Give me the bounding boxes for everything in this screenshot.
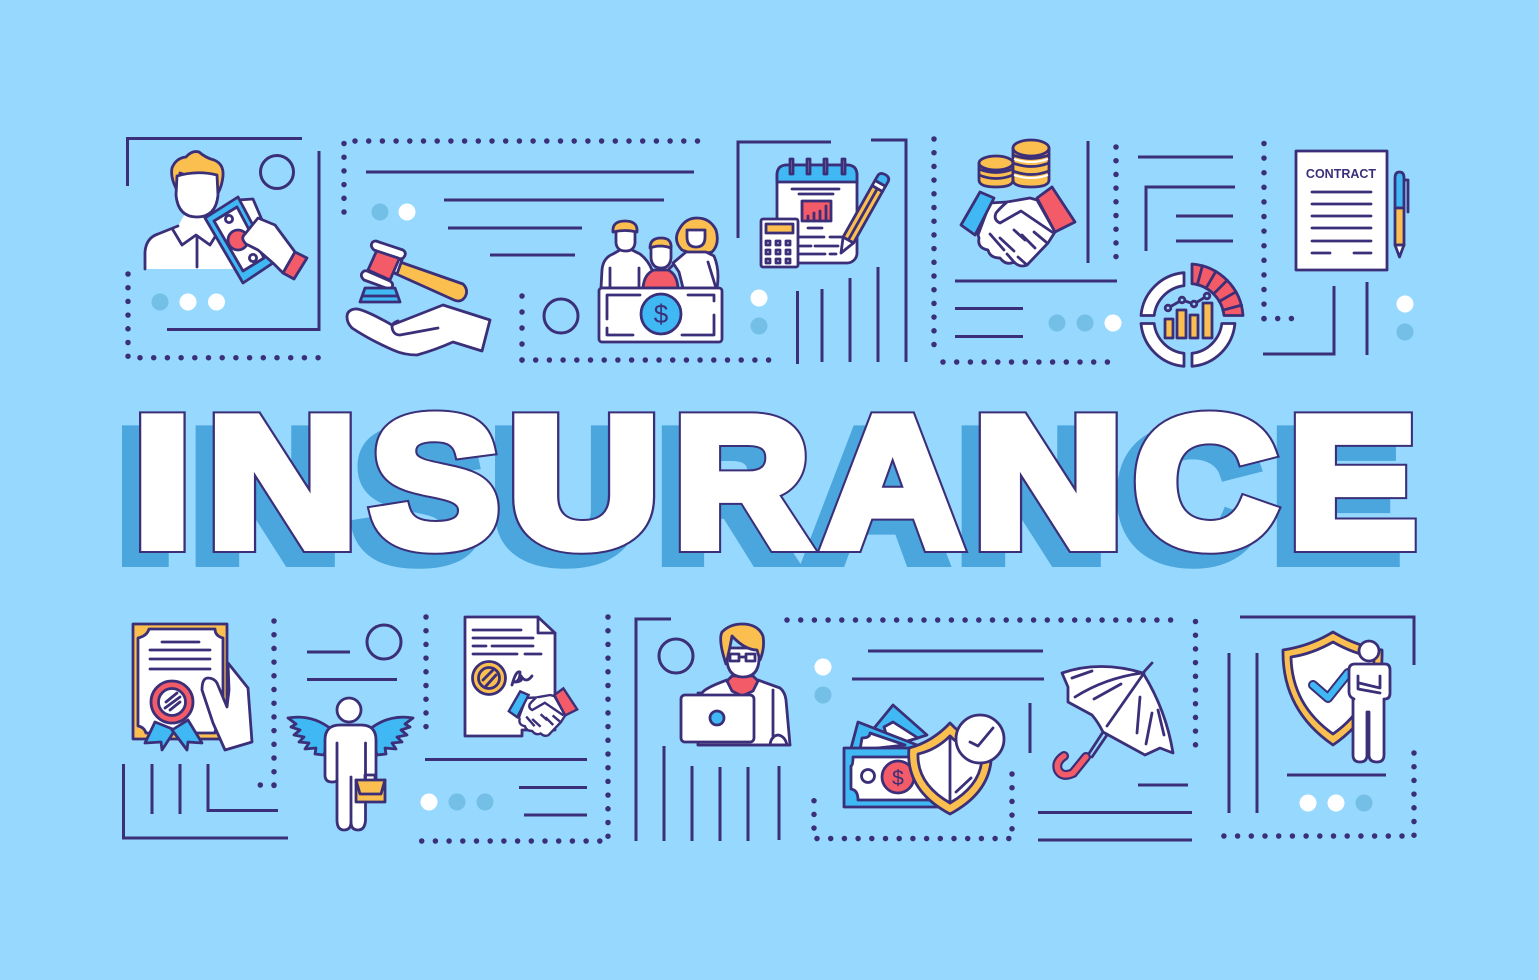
icon: contract document [1296,151,1387,270]
title: INSURANCE: A [806,393,945,599]
title: INSURANCE: U [508,379,659,585]
title: INSURANCE: N [973,379,1123,585]
title: INSURANCE: N [973,379,1123,585]
icon: gavel over open hand [347,241,490,355]
panel: contract [1263,144,1414,355]
icon: pen [1395,172,1408,257]
icon: contract document: CONTRACT [1306,167,1376,181]
icon: signed document with handshake [465,617,577,736]
title: INSURANCE: A [823,379,962,585]
icon: coins [979,140,1049,187]
panel: money protection [787,620,1196,840]
title: INSURANCE: I [134,380,191,585]
title: INSURANCE: A [823,379,962,585]
panel: secure person [1223,617,1414,836]
icon: cash with shield and check [844,705,1004,814]
title: INSURANCE: I [117,394,174,599]
title: INSURANCE: E [1289,379,1416,585]
icon: family with banknote [599,218,722,342]
icon: shield with check and person [1283,632,1390,762]
panel: partnership [934,139,1243,366]
icon: family with banknote: $ [654,299,669,329]
title: INSURANCE: C [1134,379,1277,585]
title: INSURANCE: U [491,393,642,599]
title: INSURANCE: R [674,380,809,585]
title: INSURANCE: S [371,379,499,585]
title: INSURANCE: E [1272,393,1399,599]
title: INSURANCE: N [207,379,357,585]
title: INSURANCE: E [1289,379,1416,585]
icon: man with laptop [681,624,790,745]
panel: online agent [636,619,790,841]
icon: winged man with briefcase [288,698,413,830]
title: INSURANCE: N [956,393,1106,599]
title: INSURANCE: S [354,393,482,599]
panel: insurance agent [128,138,319,358]
icon: handshake [961,187,1075,266]
panel: budget calendar [738,140,906,364]
title: INSURANCE: C [1117,393,1260,599]
icon: certificate in hand [133,624,252,750]
icon: analytics donut chart [1141,264,1243,366]
panel: signed policy [420,617,608,841]
title: INSURANCE: R [674,380,809,585]
panel: guardian angel [288,625,413,830]
panel: legal protection [344,141,771,361]
icon: calendar, calculator and pencil [761,159,890,267]
title: INSURANCE [117,379,1416,599]
title: INSURANCE: N [190,393,340,599]
title: INSURANCE: S [371,379,499,585]
title: INSURANCE: R [657,394,792,599]
title: INSURANCE: C [1134,379,1277,585]
icon: man receiving money [145,152,307,283]
panel: certificate [124,621,288,838]
title: INSURANCE: I [134,380,191,585]
icon: cash with shield and check: $ [892,767,904,790]
icon: umbrella [1057,663,1173,775]
title: INSURANCE: N [207,379,357,585]
title: INSURANCE: U [508,379,659,585]
